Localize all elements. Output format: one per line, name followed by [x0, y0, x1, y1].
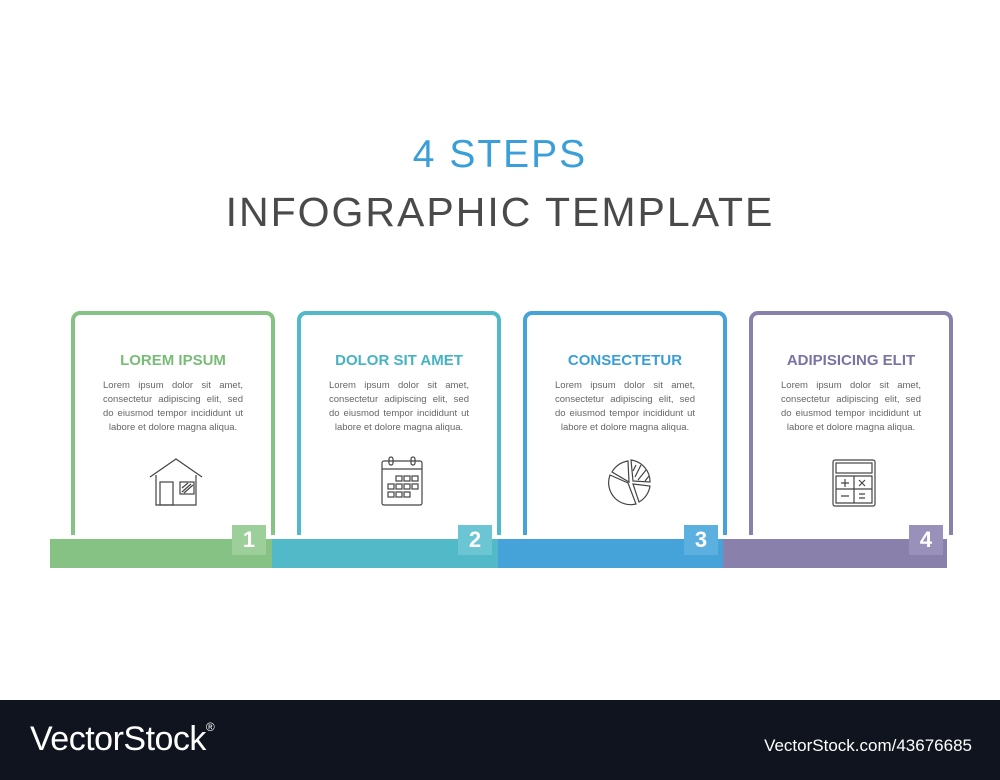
panel: step 2: DOLOR SIT AMET — [335, 352, 463, 369]
number badge 1: 1 — [243, 527, 255, 552]
panel: step 2 — [297, 311, 501, 535]
band segment 3 — [498, 539, 723, 568]
panel: step 1: Lorem ipsum dolor sit amet, consectetur adipiscing elit, sed do eiusmod tempor incididunt ut labore et dolore magna aliqua. — [103, 380, 243, 433]
icon: calculator — [832, 459, 876, 507]
panel: step 4: ADIPISICING ELIT — [787, 352, 915, 369]
panel: step 4 — [749, 311, 953, 535]
icon: pie chart — [608, 459, 651, 506]
title — [226, 133, 774, 235]
title: 4 STEPS — [413, 133, 587, 176]
band segment 1 — [50, 539, 272, 568]
number badge 3 — [684, 525, 718, 555]
footer bar — [0, 700, 1000, 780]
panel: step 2: Lorem ipsum dolor sit amet, consectetur adipiscing elit, sed do eiusmod tempor incididunt ut labore et dolore magna aliqua. — [329, 380, 469, 433]
panel: step 3 — [523, 311, 727, 535]
band segment 2 — [272, 539, 498, 568]
icon: house — [150, 458, 202, 506]
title: INFOGRAPHIC TEMPLATE — [226, 189, 774, 235]
panel: step 3: CONSECTETUR — [568, 352, 682, 369]
number badge 1 — [232, 525, 266, 555]
panel: step 1: LOREM IPSUM — [120, 352, 226, 369]
footer logo: VectorStock® — [30, 720, 214, 758]
number badge 2: 2 — [469, 527, 481, 552]
panel: step 3: Lorem ipsum dolor sit amet, consectetur adipiscing elit, sed do eiusmod tempor incididunt ut labore et dolore magna aliqua. — [555, 380, 695, 433]
number badge 3: 3 — [695, 527, 707, 552]
icon: calendar — [381, 456, 423, 506]
panel: step 4: Lorem ipsum dolor sit amet, consectetur adipiscing elit, sed do eiusmod tempor incididunt ut labore et dolore magna aliqua. — [781, 380, 921, 433]
panel: step 1 — [71, 311, 275, 535]
number badge 4: 4 — [920, 527, 932, 552]
number badge 4 — [909, 525, 943, 555]
footer url: VectorStock.com/43676685 — [764, 736, 972, 755]
band segment 4 — [723, 539, 947, 568]
number badge 2 — [458, 525, 492, 555]
